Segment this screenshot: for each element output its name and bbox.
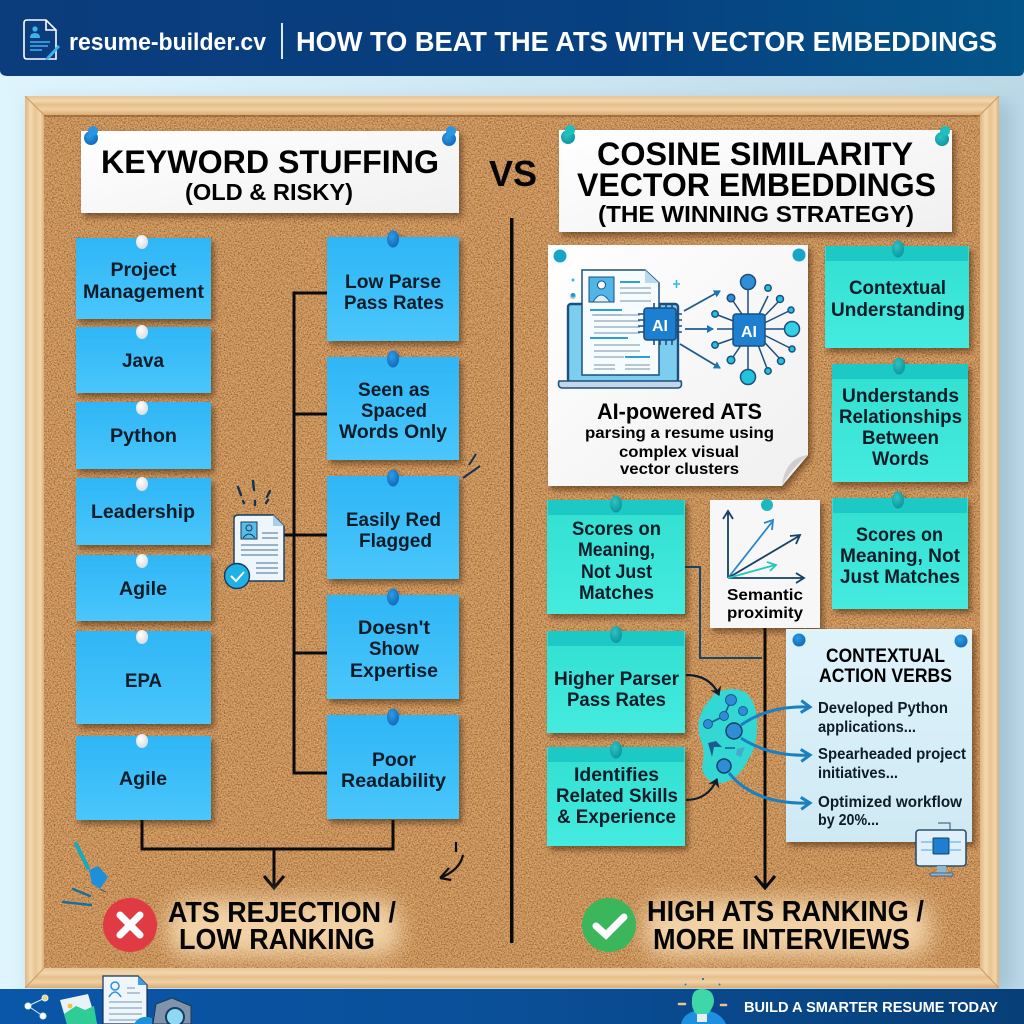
arrows: cluster to verbs: [729, 707, 810, 803]
note: identifies related skills: Related Skills: [556, 786, 678, 807]
note: identifies related skills: Identifies: [574, 765, 659, 786]
card: contextual action verbs: [786, 629, 972, 842]
note: understands relationships: Between: [862, 428, 939, 449]
note: agile 2: [76, 734, 211, 820]
card: contextual action verbs: Developed Python: [818, 700, 948, 717]
note: understands relationships: Relationships: [839, 407, 962, 428]
header bar: [0, 0, 1024, 76]
note: scores on meaning left: Matches: [579, 583, 654, 604]
note: project management: Management: [83, 282, 205, 303]
note: project management: Project: [110, 260, 177, 281]
card: contextual action verbs: ACTION VERBS: [819, 666, 952, 687]
card: ai-powered ats: vector clusters: [620, 461, 739, 478]
icon: computer chip monitor: [916, 823, 966, 876]
note: scores on meaning right: [832, 492, 968, 609]
card: ai-powered ats: AI-powered ATS: [597, 399, 762, 424]
center divider: [510, 218, 514, 943]
note: scores on meaning right: Scores on: [856, 525, 943, 546]
heading: cosine similarity: (THE WINNING STRATEGY): [598, 201, 914, 227]
note: higher parser pass rates: Pass Rates: [567, 690, 666, 711]
note: agile: Agile: [119, 579, 167, 600]
note: python: [76, 401, 211, 469]
footer bar: [0, 976, 1024, 1024]
note: contextual understanding: Understanding: [831, 300, 965, 321]
card: ai-powered ats: parsing a resume using: [585, 425, 774, 442]
heading: cosine similarity: [559, 125, 952, 232]
note: identifies related skills: & Experience: [557, 807, 676, 828]
heading: keyword stuffing: KEYWORD STUFFING: [101, 144, 439, 180]
note: scores on meaning left: Scores on: [572, 519, 661, 540]
note: java: [76, 325, 211, 393]
result: ats rejection: LOW RANKING: [179, 924, 375, 956]
icon: image card: [60, 994, 97, 1024]
note: scores on meaning left: [547, 496, 685, 614]
icon: resume logo: [24, 20, 60, 60]
panel: consequence sticky notes: [327, 230, 459, 819]
note: easily red flagged: Easily Red: [346, 510, 441, 531]
note: leadership: Leadership: [91, 502, 195, 523]
result: high ranking: [582, 896, 930, 956]
note: low parse pass rates: Pass Rates: [344, 293, 444, 314]
note: seen as spaced words only: Words Only: [339, 422, 447, 443]
note: poor readability: [327, 708, 459, 819]
card: contextual action verbs: CONTEXTUAL: [826, 646, 945, 667]
note: agile 2: Agile: [119, 769, 167, 790]
illustration: ai vector network: [712, 274, 800, 384]
connectors: keyword column: [142, 293, 393, 888]
note: understands relationships: [832, 358, 968, 482]
note: poor readability: Readability: [341, 771, 446, 792]
note: doesn't show expertise: [327, 588, 459, 699]
result: ats rejection: ATS REJECTION /: [168, 897, 396, 929]
arrows: resume to network: [680, 291, 720, 368]
icon: light bulb: [679, 978, 726, 1024]
icon: curved arrow: [440, 842, 463, 880]
note: seen as spaced words only: [327, 350, 459, 460]
heading: vs: VS: [489, 153, 537, 194]
icon: cluster nodes front: [717, 723, 742, 773]
note: identifies related skills: [547, 742, 685, 846]
card: contextual action verbs: Spearheaded project: [818, 746, 967, 763]
logo text: resume-builder.cv: [69, 29, 267, 56]
card: contextual action verbs: initiatives...: [818, 765, 898, 782]
note: scores on meaning right: Meaning, Not: [840, 546, 961, 567]
card: semantic proximity: [710, 499, 820, 628]
card: contextual action verbs: applications...: [818, 719, 916, 736]
note: contextual understanding: Contextual: [849, 278, 946, 299]
icon: resume document: [224, 481, 284, 588]
panel: teal notes: [547, 240, 969, 846]
icon: camera: [134, 998, 191, 1024]
note: java: Java: [122, 351, 164, 372]
card: ai-powered ats: [548, 245, 808, 486]
note: easily red flagged: Flagged: [359, 531, 432, 552]
note: agile: [76, 554, 211, 621]
note: contextual understanding: [825, 240, 969, 348]
icon: red cross: [103, 898, 157, 952]
card: semantic proximity: Semantic: [727, 587, 803, 604]
note: project management: [76, 235, 211, 319]
heading: keyword stuffing: (OLD & RISKY): [185, 179, 353, 205]
note: doesn't show expertise: Show: [369, 639, 419, 660]
note: python: Python: [110, 426, 177, 447]
icon: scribble lines right of note: [463, 454, 480, 478]
icon: vector cluster: [698, 689, 757, 783]
icon: loose push pin: [63, 844, 108, 905]
arrows: notes to cluster: [686, 675, 719, 800]
card: ai-powered ats: complex visual: [619, 444, 739, 461]
note: higher parser pass rates: [547, 626, 685, 733]
panel: keyword sticky notes: [76, 235, 211, 820]
note: epa: [76, 630, 211, 724]
result: high ranking: HIGH ATS RANKING /: [647, 896, 924, 928]
icon: network dots: [25, 995, 48, 1019]
note: scores on meaning left: Not Just: [581, 562, 653, 583]
heading: cosine similarity: COSINE SIMILARITY: [597, 136, 913, 172]
footer text: BUILD A SMARTER RESUME TODAY: [744, 999, 998, 1016]
illustration: resume on laptop with chip: AI: [652, 318, 668, 335]
note: understands relationships: Understands: [842, 386, 959, 407]
chart: vectors: [723, 511, 804, 583]
note: leadership: [76, 477, 211, 545]
result: high ranking: MORE INTERVIEWS: [653, 924, 910, 956]
note: low parse pass rates: [327, 230, 459, 341]
icon: resume sheet: [103, 976, 147, 1024]
heading: cosine similarity: VECTOR EMBEDDINGS: [577, 167, 936, 203]
card: contextual action verbs: Optimized workflow: [818, 794, 963, 811]
result: ats rejection: [103, 897, 400, 956]
note: low parse pass rates: Low Parse: [345, 272, 441, 293]
note: easily red flagged: [327, 470, 459, 579]
note: doesn't show expertise: Expertise: [350, 661, 438, 682]
card: ai-powered ats: AI: [741, 324, 757, 341]
card: semantic proximity: proximity: [727, 605, 803, 622]
note: scores on meaning right: Just Matches: [840, 567, 960, 588]
note: understands relationships: Words: [872, 449, 929, 470]
note: doesn't show expertise: Doesn't: [358, 618, 431, 639]
note: epa: EPA: [125, 671, 162, 692]
icon: green check: [582, 898, 636, 952]
card: contextual action verbs: by 20%...: [818, 812, 879, 829]
title: HOW TO BEAT THE ATS WITH VECTOR EMBEDDINGS: [296, 26, 997, 57]
illustration: resume on laptop with chip: [558, 270, 682, 388]
note: seen as spaced words only: Spaced: [361, 401, 427, 422]
note: poor readability: Poor: [372, 750, 417, 771]
heading: keyword stuffing: [81, 126, 459, 213]
note: higher parser pass rates: Higher Parser: [554, 669, 680, 690]
note: seen as spaced words only: Seen as: [358, 380, 430, 401]
note: scores on meaning left: Meaning,: [578, 540, 655, 561]
connectors: embedding column: [685, 567, 775, 888]
